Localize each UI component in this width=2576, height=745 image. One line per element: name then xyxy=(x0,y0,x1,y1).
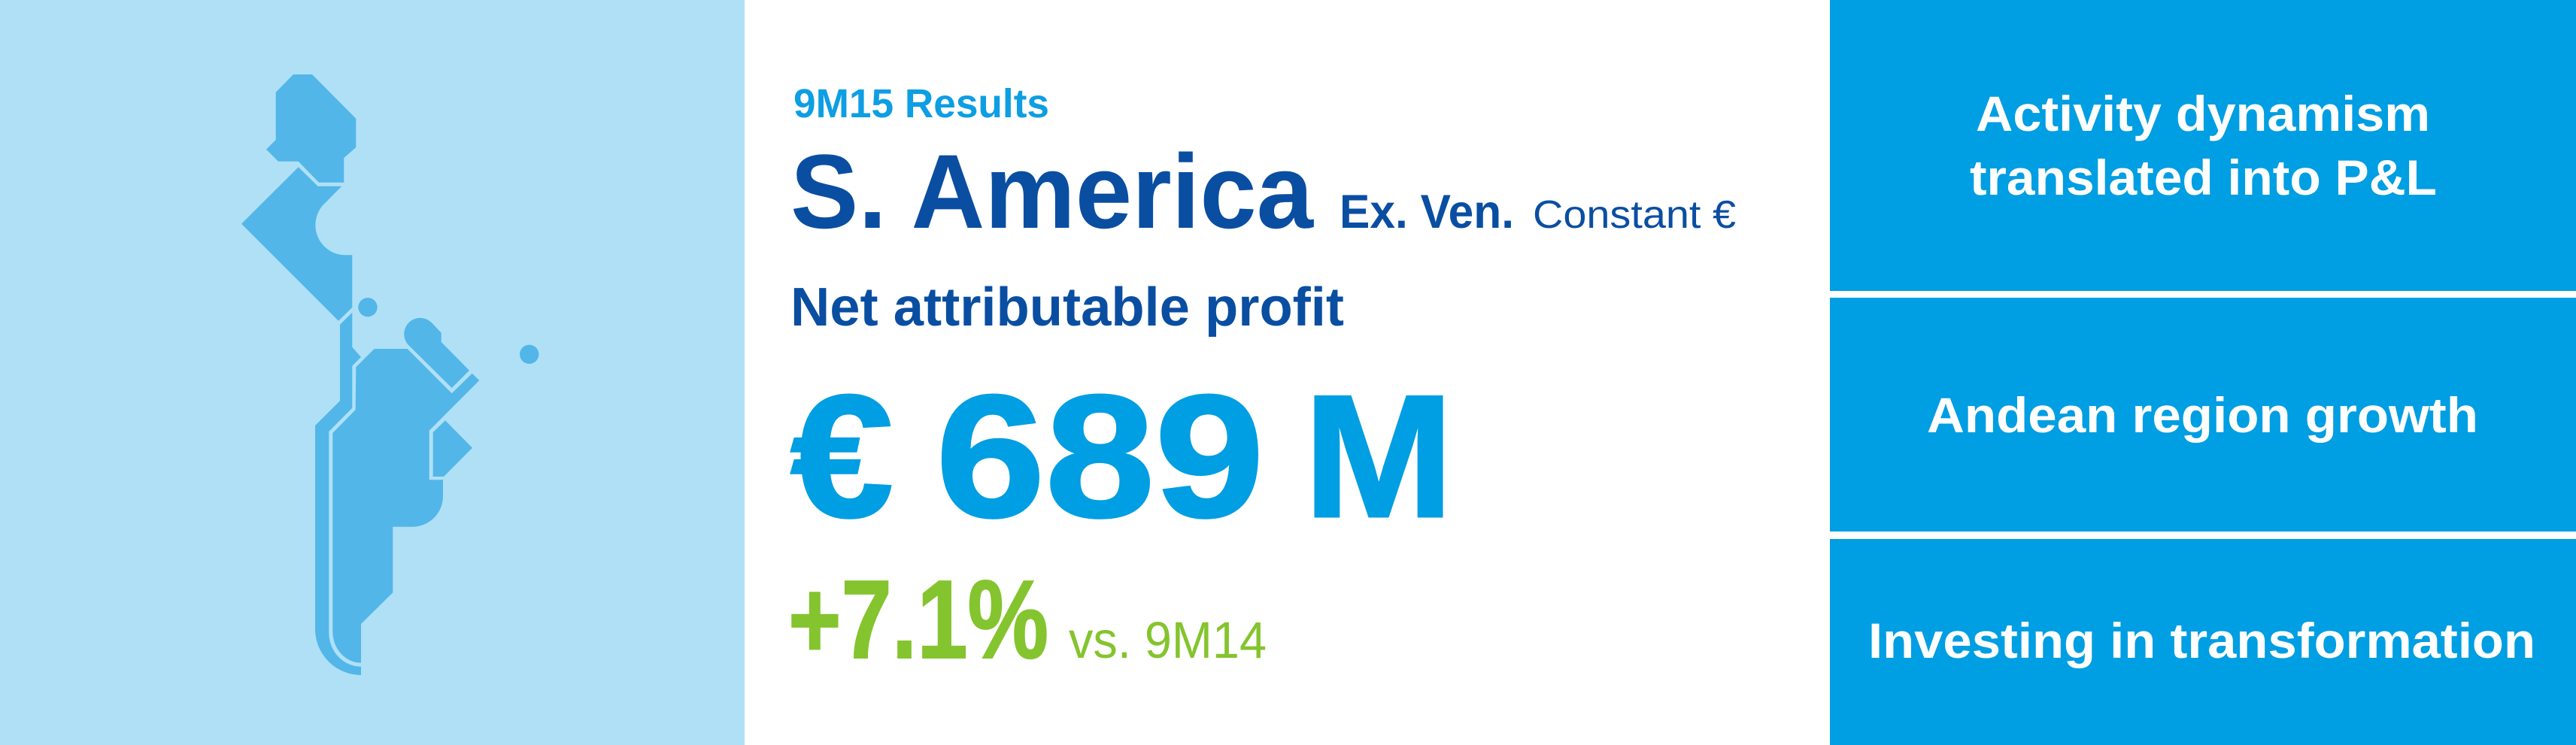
main value: € xyxy=(790,359,894,554)
map region: Chile xyxy=(315,313,361,675)
box 2 text: Andean region growth xyxy=(1927,387,2478,443)
map panel background xyxy=(0,0,745,745)
box 1 background xyxy=(1830,0,2576,291)
map region: Peru and Ecuador xyxy=(241,167,352,321)
box 3 background xyxy=(1830,539,2576,745)
box 1 text xyxy=(1970,86,2437,205)
box 1 text: Activity dynamism xyxy=(1976,86,2430,141)
main value: M xyxy=(1303,359,1454,554)
main value xyxy=(790,359,1454,554)
map region: Bolivia xyxy=(404,318,469,388)
main value: 689 xyxy=(936,359,1264,554)
panel: results text xyxy=(788,81,1736,682)
scope note: Ex. Ven. xyxy=(1340,186,1514,238)
driver box 1 xyxy=(1830,0,2576,291)
region heading: S. America xyxy=(790,132,1314,250)
driver box 2 xyxy=(1830,298,2576,531)
box 3 text: Investing in transformation xyxy=(1868,613,2535,668)
metric label: Net attributable profit xyxy=(790,277,1344,338)
growth percentage: +7.1% xyxy=(788,558,1048,682)
box 1 text: translated into P&L xyxy=(1970,150,2437,205)
map region: Uruguay xyxy=(433,420,472,477)
icon: South America map xyxy=(241,74,539,675)
box 2 background xyxy=(1830,298,2576,531)
panel: key drivers xyxy=(1830,0,2576,745)
comparison note: vs. 9M14 xyxy=(1069,611,1267,669)
period label: 9M15 Results xyxy=(793,81,1049,126)
driver box 3 xyxy=(1830,539,2576,745)
map region: Argentina xyxy=(332,349,479,663)
map dot: island xyxy=(520,345,539,364)
currency note: Constant € xyxy=(1533,193,1736,237)
map region: Colombia xyxy=(266,74,356,183)
map dot: Panama xyxy=(358,298,378,316)
panel: map xyxy=(0,0,745,745)
